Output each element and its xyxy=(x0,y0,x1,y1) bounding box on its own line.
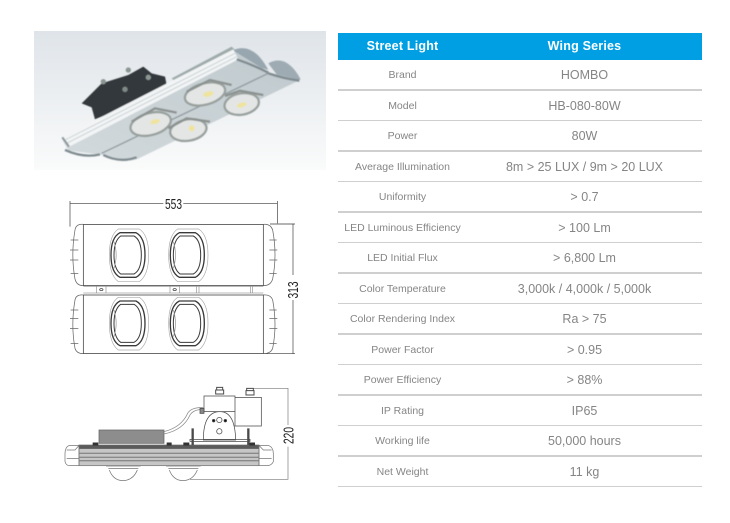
row: IP Rating: IP Rating xyxy=(381,404,424,416)
row: Color Temperature xyxy=(338,274,702,304)
row: Power Efficiency: Power Efficiency xyxy=(364,374,441,386)
row: Average Illumination: Average Illumination xyxy=(355,160,450,172)
row: LED Initial Flux: > 6,800 Lm xyxy=(553,251,616,265)
row: Net Weight: 11 kg xyxy=(570,464,599,478)
row: LED Luminous Efficiency: > 100 Lm xyxy=(558,220,611,234)
side-view technical drawing: 220 xyxy=(280,427,298,444)
lens 2 xyxy=(169,229,208,282)
row: Power: 80W xyxy=(572,129,597,143)
row: IP Rating xyxy=(338,396,702,426)
row: Model: HB-080-80W xyxy=(548,98,621,112)
table header: Wing Series xyxy=(548,39,621,53)
row: LED Initial Flux xyxy=(338,243,702,274)
lens 1 xyxy=(109,229,149,282)
row: Net Weight xyxy=(338,456,702,487)
row: Color Temperature: Color Temperature xyxy=(359,282,446,294)
row: LED Initial Flux: LED Initial Flux xyxy=(367,252,438,264)
row: Power Factor: > 0.95 xyxy=(567,342,602,356)
row: LED Luminous Efficiency: LED Luminous Efficiency xyxy=(344,222,461,234)
row: Brand: Brand xyxy=(388,69,417,81)
lens 4 xyxy=(169,297,208,350)
row: Uniformity xyxy=(338,182,702,212)
row: Brand xyxy=(338,60,702,90)
table header: Street Light xyxy=(367,39,438,53)
row: Power: Power xyxy=(388,130,417,142)
top-view technical drawing: 553 xyxy=(165,196,182,213)
row: Working life: Working life xyxy=(375,435,430,447)
row: Uniformity: > 0.7 xyxy=(570,190,599,204)
row: Model: Model xyxy=(388,100,417,112)
top-view technical drawing: 313 xyxy=(285,282,302,298)
row: Average Illumination: 8m > 25 LUX / 9m > 20 LUX xyxy=(506,160,663,174)
row: Power Efficiency xyxy=(338,365,702,396)
lens 3 xyxy=(109,297,149,350)
row: Model xyxy=(338,90,702,121)
row: Power xyxy=(338,121,702,152)
row: Average Illumination xyxy=(338,152,702,182)
row: LED Luminous Efficiency xyxy=(338,212,702,243)
row: Brand: HOMBO xyxy=(561,68,608,82)
row: Uniformity: Uniformity xyxy=(379,191,426,203)
row: Color Rendering Index: Ra > 75 xyxy=(562,312,607,326)
row: Color Rendering Index xyxy=(338,304,702,334)
row: Net Weight: Net Weight xyxy=(377,466,428,478)
row: Power Factor xyxy=(338,334,702,365)
row: IP Rating: IP65 xyxy=(572,404,597,418)
row: Working life xyxy=(338,426,702,456)
table header xyxy=(338,33,702,60)
row: Power Factor: Power Factor xyxy=(371,344,434,356)
row: Working life: 50,000 hours xyxy=(548,434,621,448)
specification table xyxy=(338,33,702,487)
row: Color Temperature: 3,000k / 4,000k / 5,000k xyxy=(518,282,651,296)
row: Power Efficiency: > 88% xyxy=(567,373,602,387)
row: Color Rendering Index: Color Rendering Index xyxy=(350,313,455,325)
